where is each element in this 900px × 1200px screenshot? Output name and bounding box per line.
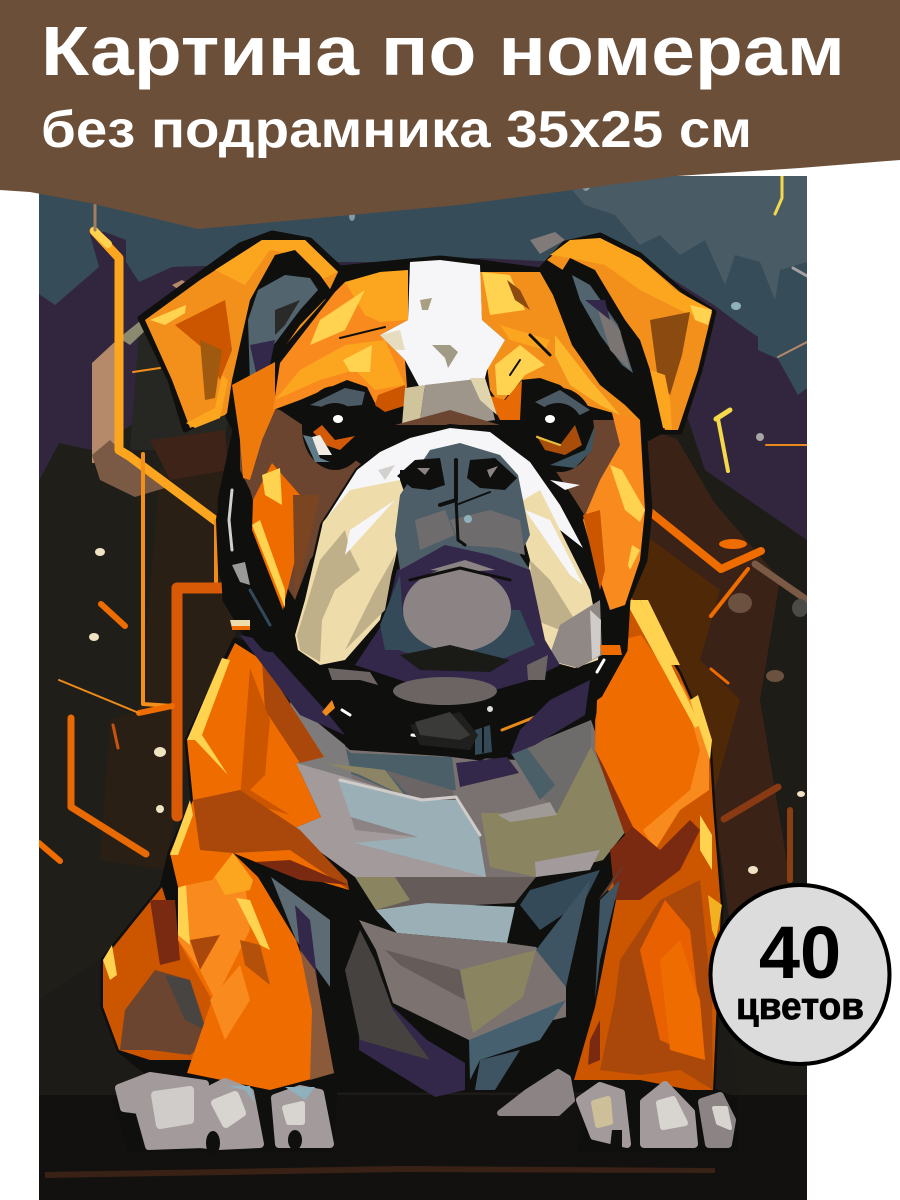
forehead left (273, 270, 408, 412)
neck purple (240, 635, 345, 735)
right eye (535, 388, 595, 472)
left shoulder (170, 643, 349, 890)
collar (228, 490, 622, 755)
painting background (39, 176, 808, 1200)
bulldog body (103, 592, 736, 1155)
center paw (500, 1072, 572, 1113)
white blaze (380, 260, 505, 425)
left cheek (232, 362, 370, 610)
nose and snout (395, 443, 530, 570)
bulldog head (140, 233, 714, 758)
left eye (302, 386, 368, 470)
right cheek (555, 405, 645, 610)
mouth and lower jaw (328, 545, 560, 705)
panel: painting artwork (39, 176, 808, 1200)
right paws (580, 1085, 732, 1148)
title: Картина по номерам (41, 12, 845, 90)
subtitle: без подрамника 35х25 см (41, 101, 752, 159)
muzzle (295, 426, 602, 672)
right body (574, 592, 722, 1090)
left front leg and haunch (103, 853, 334, 1090)
chest fur (290, 700, 629, 1097)
badge: 40 colours (710, 885, 890, 1064)
badge: 40 colours: 40 (759, 911, 841, 994)
banner: brown header (0, 0, 900, 229)
badge: 40 colours: цветов (736, 986, 864, 1028)
forehead right (480, 272, 640, 420)
left ear (145, 240, 338, 428)
right ear (547, 238, 712, 430)
left paws (119, 1076, 330, 1155)
